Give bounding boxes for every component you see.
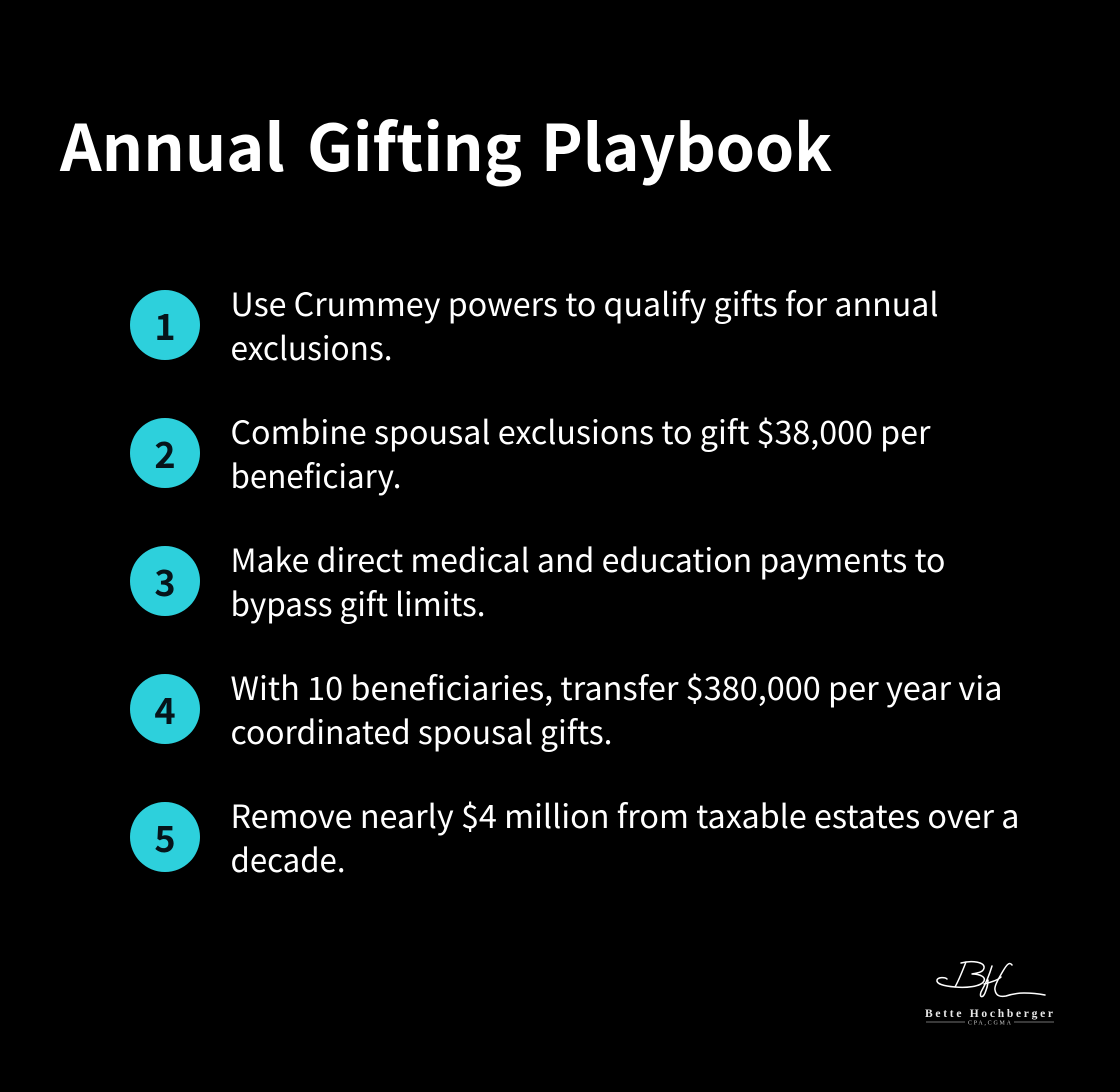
step 4 text (230, 664, 1002, 754)
logo name: Bette Hochberger (925, 1008, 1053, 1020)
number 2: 2 (154, 427, 176, 479)
step 5 (130, 792, 1020, 882)
step 1 text: Use Crummey powers to qualify gifts for annual (230, 280, 938, 326)
step 3 (130, 536, 945, 626)
step 2 text: beneficiary. (230, 452, 402, 498)
icon: BH signature (937, 962, 1045, 997)
logo: Bette Hochberger signature (925, 962, 1054, 1026)
title (59, 98, 832, 190)
title: Annual (59, 98, 285, 190)
step 4 text: With 10 beneficiaries, transfer $380,000 per year via (230, 664, 1002, 710)
step 5 text (230, 792, 1020, 882)
number 4: 4 (154, 683, 176, 735)
step 1 text: exclusions. (230, 324, 392, 370)
title: Gifting (307, 98, 522, 190)
step 1 (130, 280, 938, 370)
step 4 text: coordinated spousal gifts. (230, 708, 612, 754)
badge 4 (130, 674, 200, 744)
badge 2 (130, 418, 200, 488)
step 3 text (230, 536, 945, 626)
badge 3 (130, 546, 200, 616)
number 5: 5 (154, 811, 176, 863)
badge 5 (130, 802, 200, 872)
step 2 text (230, 408, 931, 498)
step 4 (130, 664, 1002, 754)
step 5 text: decade. (230, 836, 346, 882)
step 5 text: Remove nearly $4 million from taxable estates over a (230, 792, 1020, 838)
step 3 text: Make direct medical and education payments to (230, 536, 945, 582)
number 1: 1 (154, 299, 176, 351)
logo credentials: CPA,CGMA (968, 1020, 1012, 1026)
number 3: 3 (154, 555, 176, 607)
badge 1 (130, 290, 200, 360)
step 2 text: Combine spousal exclusions to gift $38,000 per (230, 408, 931, 454)
step 3 text: bypass gift limits. (230, 580, 486, 626)
step 2 (130, 408, 931, 498)
title: Playbook (541, 98, 832, 190)
step 1 text (230, 280, 938, 370)
